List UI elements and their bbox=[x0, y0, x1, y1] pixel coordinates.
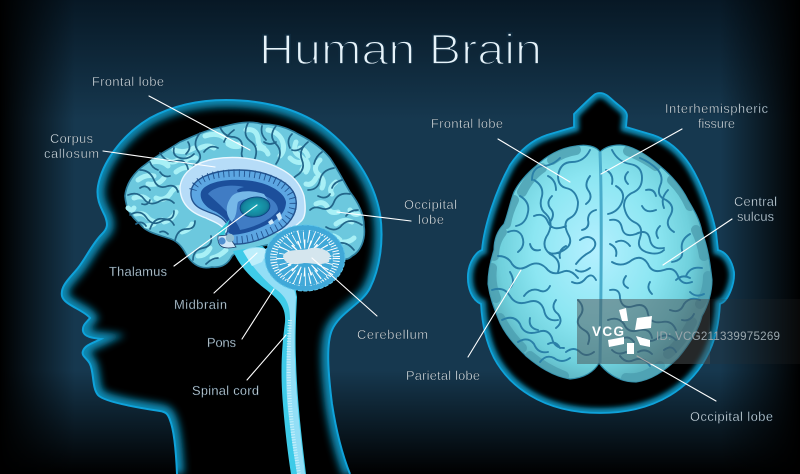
labels: top view: Interhemispheric bbox=[665, 101, 769, 116]
labels: top view: Frontal lobe bbox=[431, 116, 503, 131]
caudate highlight bbox=[227, 191, 268, 222]
labels: side view: Spinal cord bbox=[192, 383, 259, 398]
inner mid-blue layer bbox=[208, 186, 278, 230]
labels: side view: Occipital bbox=[404, 197, 457, 212]
thalamus bbox=[239, 195, 271, 219]
sulci bbox=[492, 150, 596, 362]
brain: top view bbox=[488, 145, 712, 382]
brain: side view bbox=[125, 122, 364, 268]
watermark logo: VCG bbox=[592, 324, 624, 339]
watermark logo bbox=[592, 308, 652, 354]
labels: top view: fissure bbox=[698, 116, 735, 131]
labels: top view: Central bbox=[734, 194, 777, 209]
labels: side view: callosum bbox=[44, 146, 99, 161]
brain stem and spinal cord bbox=[233, 246, 306, 474]
gyri highlights bbox=[128, 130, 358, 258]
hemispheres bbox=[488, 145, 712, 382]
head silhouette: side view bbox=[62, 100, 382, 474]
pale arcs bbox=[268, 212, 282, 225]
labels: side view: lobe bbox=[418, 212, 444, 227]
sulci bbox=[128, 123, 362, 264]
labels: side view: Frontal lobe bbox=[92, 74, 164, 89]
labels: top view bbox=[406, 101, 777, 424]
cerebrum hemisphere bbox=[125, 122, 364, 268]
labels: side view: Corpus bbox=[50, 131, 93, 146]
leader lines bbox=[103, 96, 732, 401]
fissure bbox=[600, 152, 601, 363]
labels: top view: Parietal lobe bbox=[406, 368, 480, 383]
title: Human Brain bbox=[259, 26, 542, 74]
labels: top view: Occipital lobe bbox=[690, 409, 773, 424]
head silhouette: top view bbox=[468, 93, 734, 413]
ventricle ring with striations bbox=[191, 170, 296, 244]
watermark band bbox=[577, 299, 800, 364]
corpus callosum bbox=[180, 158, 305, 236]
labels: side view: Thalamus bbox=[109, 264, 167, 279]
bottom cup bbox=[218, 235, 236, 248]
inner dark blue chamber bbox=[201, 180, 286, 235]
outer darker gyri bbox=[492, 150, 708, 378]
labels: side view: Midbrain bbox=[174, 297, 227, 312]
fornix cyan wedge bbox=[218, 219, 230, 240]
midbrain bbox=[243, 248, 268, 266]
watermark id: ID: VCG211339975269 bbox=[656, 330, 780, 343]
cerebellum bbox=[265, 225, 345, 291]
labels: side view bbox=[44, 74, 457, 398]
labels: top view: sulcus bbox=[737, 209, 774, 224]
labels: side view: Pons bbox=[207, 335, 236, 350]
labels: side view: Cerebellum bbox=[357, 327, 428, 342]
